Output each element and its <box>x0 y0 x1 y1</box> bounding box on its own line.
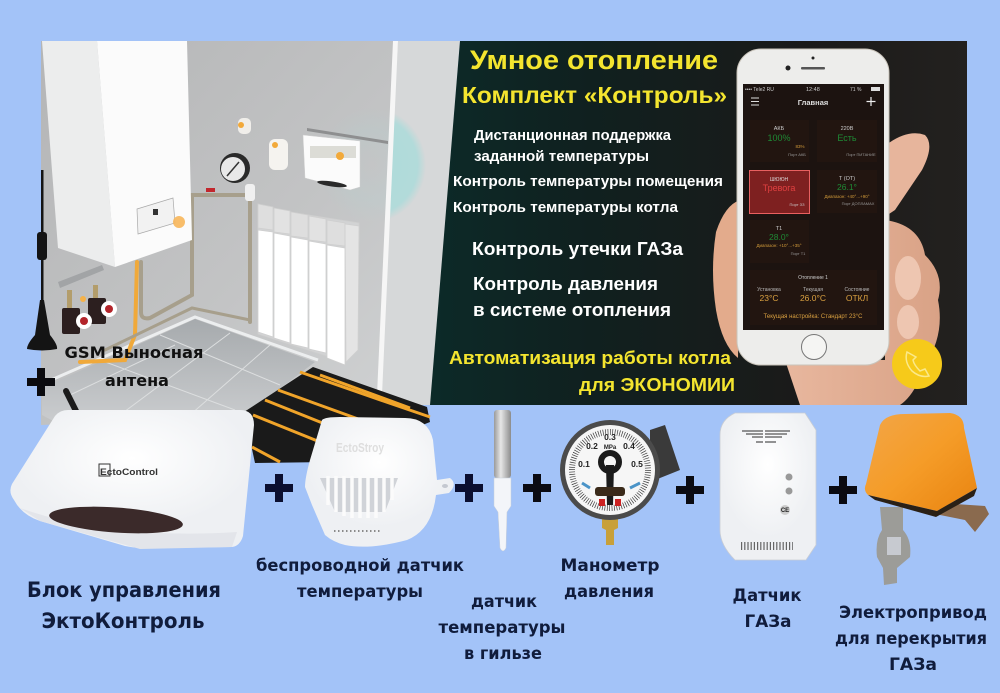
gas shutoff valve actuator <box>865 413 989 585</box>
heating summary: Установка <box>757 287 781 293</box>
tile: mains: Порт ПИТАНИЕ <box>846 152 876 157</box>
tile: mains: 220В <box>841 126 854 132</box>
plus <box>265 474 293 502</box>
tile: room temperature: Т1 <box>776 226 782 232</box>
control unit device <box>10 410 254 549</box>
home button <box>802 334 826 360</box>
subtitle: Комплект «Контроль» <box>462 82 727 108</box>
panel: boiler room illustration <box>41 41 460 430</box>
pressure gauge: 0.4 <box>623 441 635 451</box>
speaker and camera <box>786 56 825 70</box>
tile: alarm <box>750 170 810 214</box>
probe label: в гильзе <box>464 644 542 664</box>
heating summary: ОТКЛ <box>846 293 868 303</box>
control unit label: Блок управления <box>27 578 221 602</box>
gauge label: Манометр <box>560 556 660 576</box>
feature: remote temperature support: заданной температуры <box>474 148 649 165</box>
tile: boiler temperature: Диапазон: +40°...+90° <box>824 194 870 199</box>
radiator <box>258 204 359 365</box>
manifold and pumps <box>58 265 117 334</box>
display window <box>48 503 184 537</box>
probe label: температуры <box>438 618 566 638</box>
feature: remote temperature support <box>474 127 672 165</box>
actuator label: Электропривод <box>839 603 987 623</box>
heating summary: Отопление 1 <box>798 275 828 281</box>
automation slogan <box>449 348 735 395</box>
tile: alarm: Тревога <box>763 183 795 193</box>
tile: mains <box>817 120 877 162</box>
tile: room temperature: 28.0° <box>769 232 789 242</box>
heating summary: 26.0°C <box>800 293 826 303</box>
pressure gauge: 0.2 <box>586 441 598 451</box>
wireless sensor label: температуры <box>297 582 423 602</box>
status bar: •••• Tele2 RU <box>745 87 774 93</box>
status bar: 71 % <box>850 87 862 93</box>
logo: EctoControl <box>100 467 158 478</box>
gas and heating pipes <box>80 195 250 362</box>
automation slogan: Автоматизация работы котла <box>449 348 732 368</box>
automation slogan: для ЭКОНОМИИ <box>579 375 735 395</box>
plus <box>27 368 55 396</box>
status bar <box>745 87 880 93</box>
nav bar <box>751 97 876 107</box>
feature: pressure: Контроль давления <box>473 274 658 294</box>
tile: battery: 100% <box>767 133 791 143</box>
tile: boiler temperature: Т (ОТ) <box>839 176 855 182</box>
gauge label <box>560 556 660 602</box>
heating summary: Текущая настройка: Стандарт 23°C <box>764 313 863 320</box>
control unit label <box>27 578 221 633</box>
feature: gas leak: Контроль утечки ГАЗа <box>472 239 684 259</box>
wall corner stripe <box>378 41 460 405</box>
floor tiles <box>42 317 318 430</box>
tile: room temperature <box>750 220 809 263</box>
plus <box>455 474 483 502</box>
actuator label: для перекрытия <box>835 629 987 649</box>
wall devices <box>206 118 388 201</box>
tile: room temperature: Диапазон: +10°...+35° <box>756 243 802 248</box>
nav bar: Главная <box>798 98 828 107</box>
underfloor heating mat <box>244 367 430 463</box>
icon: phone call button <box>892 339 942 389</box>
antenna label: GSM Выносная <box>64 343 204 362</box>
heating summary: 23°C <box>760 293 778 303</box>
tile: alarm: ШЮЮН <box>770 177 789 183</box>
tile: room temperature: Порт Т1 <box>791 251 806 256</box>
icon: GSM antenna <box>27 170 57 350</box>
control unit label: ЭктоКонтроль <box>42 609 204 633</box>
tile: boiler temperature: 26.1° <box>837 182 857 192</box>
plus <box>523 474 551 502</box>
teal glow <box>390 116 424 216</box>
hand holding phone <box>713 133 940 405</box>
feature: boiler temperature: Контроль температуры котла <box>453 199 679 216</box>
actuator label: ГАЗа <box>889 655 937 675</box>
heating summary <box>750 270 877 325</box>
gas sensor label <box>732 586 802 632</box>
pressure gauge <box>560 420 680 545</box>
tile: battery <box>750 120 809 162</box>
gas sensor <box>720 413 816 560</box>
wireless temperature sensor: EctoStroy <box>336 440 385 455</box>
heating summary: Состояние <box>845 287 870 293</box>
tile: boiler temperature: Порт ДОПЛАМАХ <box>842 201 875 206</box>
wireless sensor label: беспроводной датчик <box>256 556 464 576</box>
plus <box>829 476 857 504</box>
panel: dark info banner <box>430 41 967 405</box>
tile: battery: Порт АКБ <box>788 152 806 157</box>
pressure gauge: 0.1 <box>578 459 590 469</box>
feature: pressure: в системе отопления <box>473 300 671 320</box>
app screen <box>743 84 884 330</box>
tile: mains: Есть <box>837 133 857 143</box>
boiler <box>42 41 192 267</box>
tile: alarm: Порт ЗЗ <box>789 202 805 207</box>
pressure gauge: 0.3 <box>604 432 616 442</box>
probe label: датчик <box>471 592 537 612</box>
feature: room temperature: Контроль температуры помещения <box>453 173 723 190</box>
wireless temperature sensor <box>305 417 454 547</box>
heating summary: Текущая <box>803 287 823 293</box>
antenna label <box>64 343 204 390</box>
status bar: 12:48 <box>806 87 820 93</box>
feature: remote temperature support: Дистанционная поддержка <box>474 127 672 144</box>
tile: battery: АКБ <box>774 126 785 132</box>
feature: pressure <box>473 274 671 320</box>
tile: battery: 83% <box>795 144 805 149</box>
phone <box>737 49 889 365</box>
title: Умное отопление <box>470 45 718 75</box>
pressure gauge: MPa <box>604 445 617 451</box>
gas sensor label: ГАЗа <box>744 612 792 632</box>
gas sensor: CE <box>781 508 789 514</box>
tile: boiler temperature <box>817 170 877 213</box>
gauge label: давления <box>564 582 654 602</box>
probe label <box>438 592 566 664</box>
wireless sensor label <box>256 556 464 602</box>
actuator label <box>835 603 987 675</box>
router antenna <box>66 391 77 413</box>
gas sensor label: Датчик <box>732 586 802 606</box>
pressure gauge: 0.5 <box>631 459 643 469</box>
antenna label: антена <box>105 371 169 390</box>
sleeve temperature probe <box>494 410 511 551</box>
plus <box>676 476 704 504</box>
